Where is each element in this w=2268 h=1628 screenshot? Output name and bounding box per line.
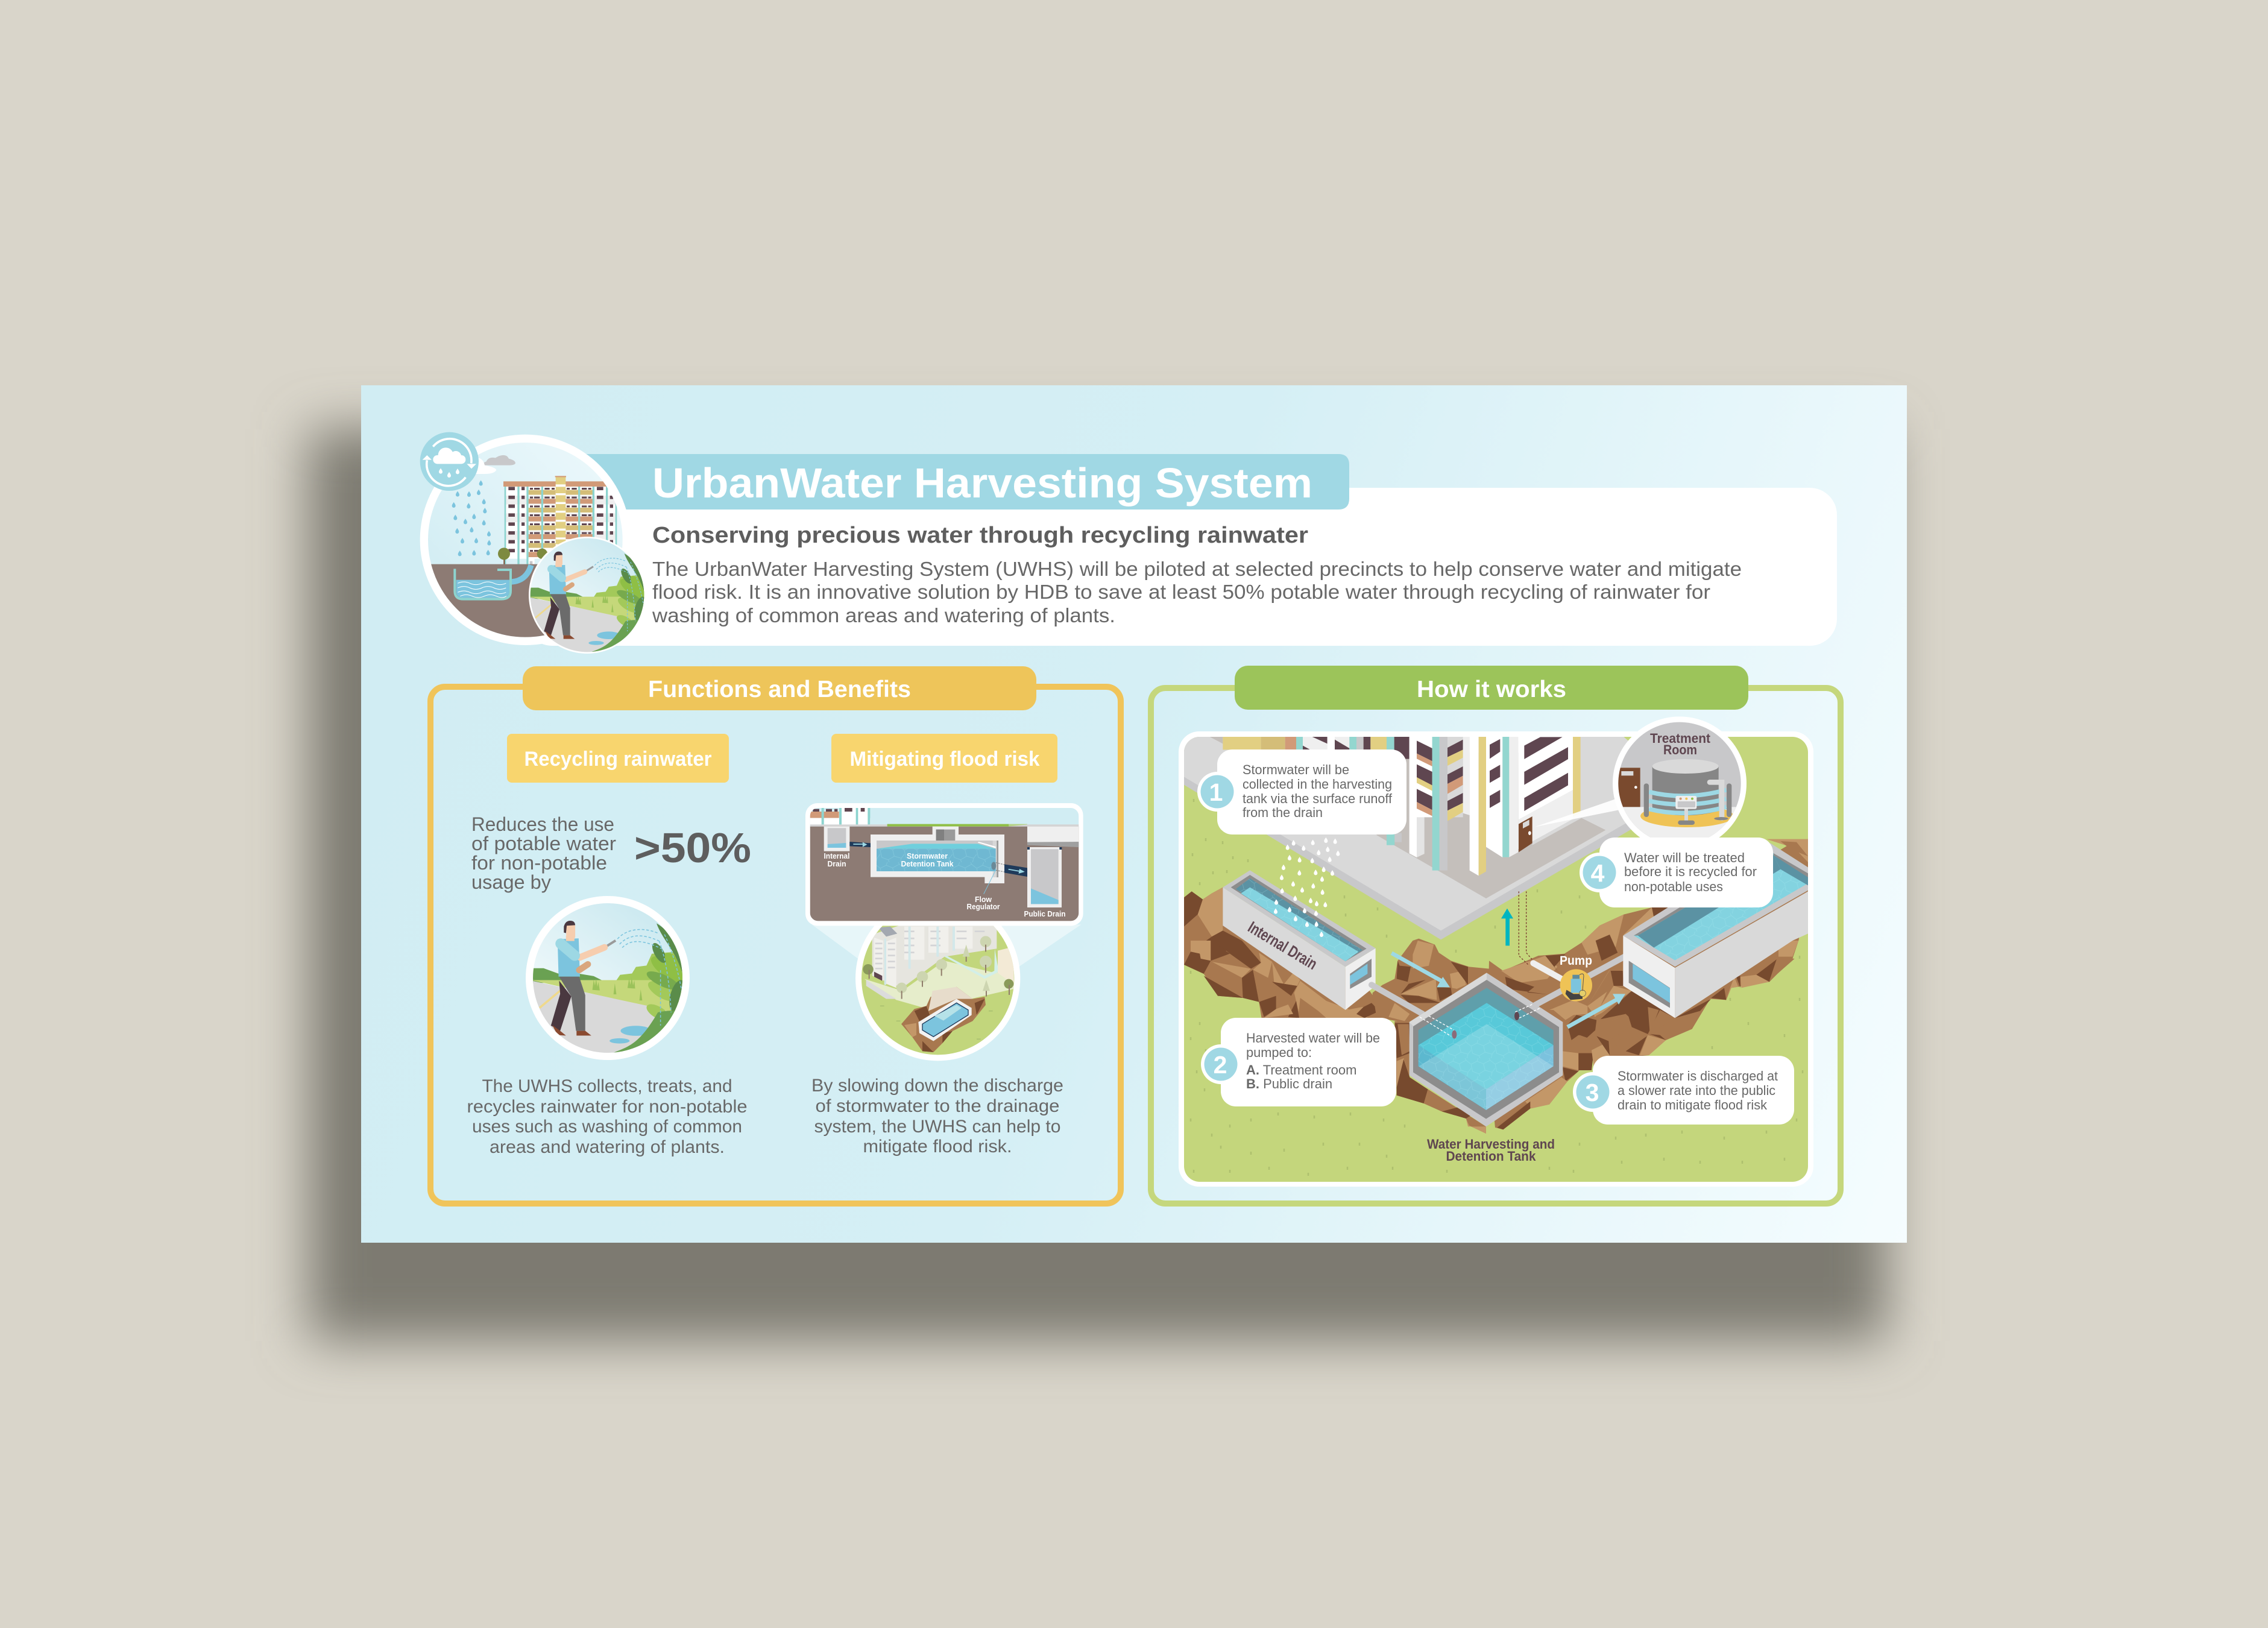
text: reduces potable water use: of potable water xyxy=(471,833,616,854)
callout 2: Harvested water will be xyxy=(1246,1030,1380,1046)
intro text xyxy=(652,558,1742,626)
treatment room inset xyxy=(1613,716,1747,850)
drain pipe xyxy=(1372,985,1423,1014)
subheading: recycling rainwater xyxy=(507,734,729,783)
callout 2 xyxy=(1201,1018,1396,1106)
stat: greater than 50 percent: >50% xyxy=(634,824,751,871)
heading: how it works: How it works xyxy=(1417,677,1566,702)
diagram labels: Flow xyxy=(975,895,992,904)
label: pump: Pump xyxy=(1560,954,1592,968)
illustration: man watering plants xyxy=(526,896,691,1060)
map frame xyxy=(1179,731,1813,1187)
callout 4: non-potable uses xyxy=(1624,879,1723,894)
callout 2: A. Treatment room xyxy=(1246,1062,1356,1077)
callout 1: 1 xyxy=(1209,778,1223,806)
label: water harvesting and detention tank: Water Harvesting and xyxy=(1427,1137,1555,1152)
diagram labels: Public Drain xyxy=(1024,909,1066,918)
callout 2: B. Public drain xyxy=(1246,1076,1332,1091)
concrete plaza xyxy=(1184,737,1631,939)
pump pipes xyxy=(1533,951,1634,1005)
label: water harvesting and detention tank xyxy=(1427,1137,1555,1164)
callout 2: pumped to: xyxy=(1246,1045,1312,1060)
illustration: rainwater cycle xyxy=(420,434,626,645)
icon: pump xyxy=(1560,969,1592,1002)
text: flood risk description: of stormwater to the drainage xyxy=(815,1096,1060,1116)
text: recycling description: uses such as washing of common xyxy=(472,1117,742,1137)
text: reduces potable water use: Reduces the use xyxy=(471,813,614,835)
detention tank xyxy=(1410,973,1563,1126)
rain drops xyxy=(1274,838,1340,937)
callout 4 xyxy=(1580,838,1773,907)
intro text: washing of common areas and watering of plants. xyxy=(652,604,1115,626)
callout 3: Stormwater is discharged at xyxy=(1618,1068,1778,1084)
text: recycling description: recycles rainwater for non-potable xyxy=(467,1097,748,1117)
intro text: flood risk. It is an innovative solution by HDB to save at least 50% potable water through recycling of rainwater for xyxy=(652,581,1710,603)
text: reduces potable water use: for non-potable xyxy=(471,852,607,874)
right public drain xyxy=(1623,843,1808,1018)
illustration: man watering plants (header) xyxy=(529,537,651,654)
callout 1 xyxy=(1197,749,1406,835)
callout 4: before it is recycled for xyxy=(1624,864,1757,879)
diagram labels: Detention Tank xyxy=(901,859,954,868)
subheading: recycling rainwater: Recycling rainwater xyxy=(524,748,711,771)
grass tufts xyxy=(1191,799,1803,1176)
illustration: flood mitigation cross-section and aerial xyxy=(805,803,1083,1061)
label: treatment room: Treatment xyxy=(1650,731,1711,746)
label: internal drain: Internal Drain xyxy=(1245,918,1320,973)
text: flood risk description: mitigate flood risk. xyxy=(863,1137,1012,1156)
soil left xyxy=(1184,888,1489,1134)
text: flood risk description: system, the UWHS can help to xyxy=(814,1117,1061,1137)
text: flood risk description xyxy=(811,1076,1063,1156)
callout 1: Stormwater will be xyxy=(1243,762,1349,777)
text: recycling description: The UWHS collects, treats, and xyxy=(482,1076,732,1096)
callout 4: Water will be treated xyxy=(1624,850,1745,865)
apartment blocks xyxy=(1223,737,1581,876)
diagram labels: Internal xyxy=(824,851,850,860)
heading: how it works xyxy=(1235,666,1748,710)
panel: functions and benefits xyxy=(430,666,1121,1204)
building shadow xyxy=(1376,752,1605,898)
soil right xyxy=(1487,839,1808,1129)
callout 1: tank via the surface runoff xyxy=(1243,791,1393,806)
subheading: mitigating flood risk xyxy=(831,734,1057,783)
callout 3: 3 xyxy=(1586,1079,1599,1106)
pointer to treatment room xyxy=(1534,799,1619,827)
poster card xyxy=(361,385,1907,1243)
text: recycling description: areas and watering of plants. xyxy=(490,1137,725,1157)
callout 3: drain to mitigate flood risk xyxy=(1618,1097,1768,1112)
label: water harvesting and detention tank: Detention Tank xyxy=(1446,1149,1536,1164)
callout 1: from the drain xyxy=(1243,805,1323,820)
diagram labels: Regulator xyxy=(967,902,1000,911)
subtitle: Conserving precious water through recycling rainwater xyxy=(652,523,1308,548)
heading: functions and benefits xyxy=(523,666,1036,710)
heading: functions and benefits: Functions and Benefits xyxy=(648,677,911,702)
header panel: intro text background xyxy=(525,488,1837,646)
flow arrows xyxy=(1391,953,1625,1027)
diagram labels xyxy=(824,851,1066,918)
label: treatment room xyxy=(1650,731,1711,757)
diagram labels: Stormwater xyxy=(907,851,948,860)
card shadow xyxy=(309,429,1887,1341)
callout 3 xyxy=(1573,1056,1794,1125)
callout 1: collected in the harvesting xyxy=(1243,777,1392,792)
text: reduces potable water use: usage by xyxy=(471,871,551,893)
title bar xyxy=(543,454,1349,510)
text: reduces potable water use xyxy=(471,813,616,893)
icon: rain recycle badge xyxy=(420,432,479,491)
isometric site map xyxy=(1184,737,1808,1182)
title: UrbanWater Harvesting System xyxy=(652,459,1312,506)
intro text: The UrbanWater Harvesting System (UWHS) will be piloted at selected precincts to help conserve water and mitigate xyxy=(652,558,1742,580)
text: flood risk description: By slowing down the discharge xyxy=(811,1076,1063,1096)
internal drain tank xyxy=(1223,870,1376,1010)
callout 4: 4 xyxy=(1591,859,1605,887)
callout 3: a slower rate into the public xyxy=(1618,1083,1775,1098)
teal arrow xyxy=(1501,909,1513,945)
dashed pipe to treatment room xyxy=(1519,891,1532,965)
subheading: mitigating flood risk: Mitigating flood risk xyxy=(850,748,1040,771)
label: treatment room: Room xyxy=(1663,742,1697,757)
callout 2: 2 xyxy=(1214,1051,1227,1079)
diagram labels: Drain xyxy=(827,859,846,868)
text: recycling description xyxy=(467,1076,748,1157)
panel: how it works xyxy=(1151,666,1841,1204)
